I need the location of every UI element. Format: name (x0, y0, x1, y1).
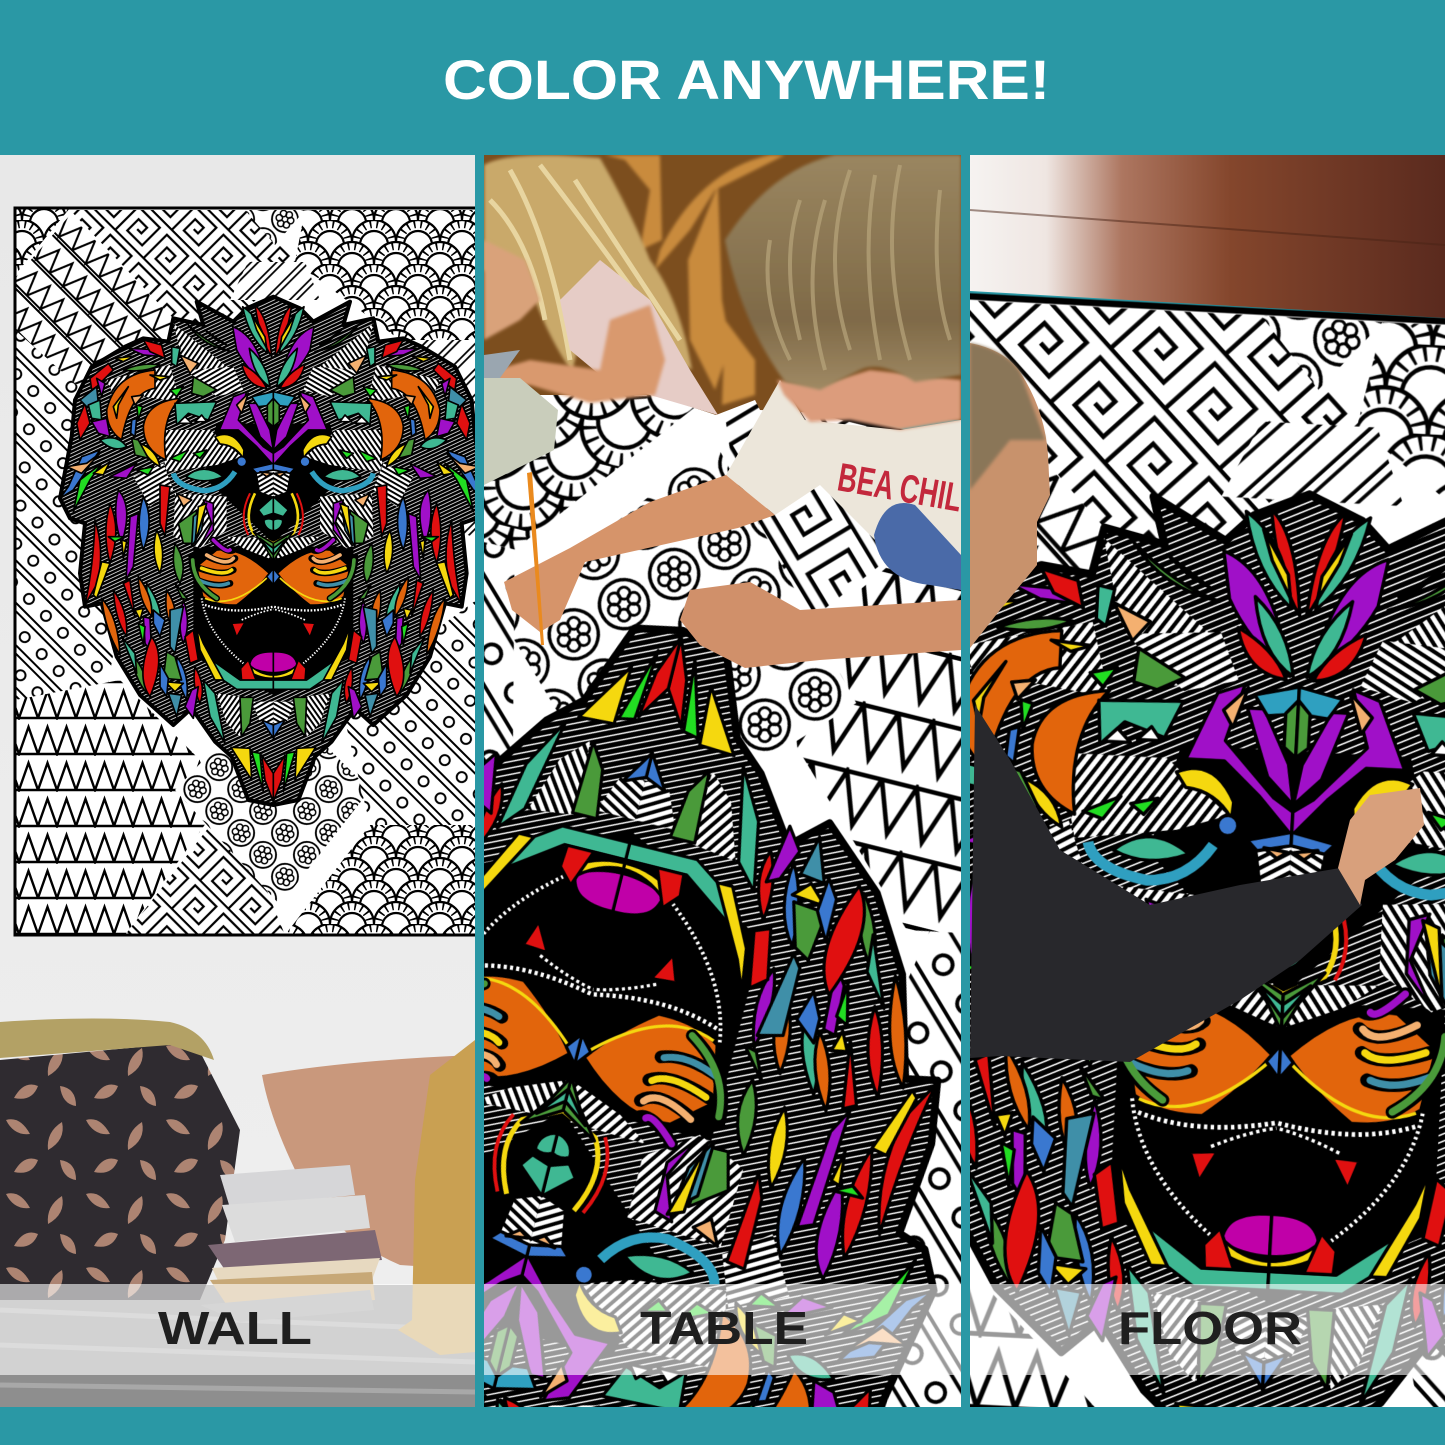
label: floor (970, 1284, 1445, 1375)
girl arm (495, 305, 665, 403)
basket with leaf pattern (0, 1042, 240, 1300)
boy hair highlights (768, 165, 950, 370)
panel: floor (970, 155, 1445, 1407)
table surface left (484, 350, 520, 378)
poster on table (484, 395, 961, 1407)
poster on floor (970, 292, 1445, 1407)
boy other arm (680, 582, 961, 668)
boy hair (725, 155, 961, 390)
label: wall (0, 1284, 475, 1375)
man sleeve (970, 705, 1362, 1062)
wood chairs background (484, 155, 961, 420)
wall background (0, 155, 475, 1407)
yellow blanket (398, 1040, 475, 1355)
plastic box (484, 378, 558, 485)
title: COLOR ANYWHERE! (443, 48, 1050, 111)
label: table: TABLE (640, 1302, 808, 1354)
wood floor (970, 155, 1445, 318)
girl hair (484, 155, 692, 372)
girl dress (560, 260, 718, 415)
man head (970, 343, 1050, 648)
label: wall: WALL (158, 1302, 312, 1354)
label: floor: FLOOR (1118, 1302, 1302, 1354)
boy writing arm (504, 475, 775, 632)
pencil (527, 472, 544, 645)
label: table (484, 1284, 961, 1375)
basket cloth (0, 1018, 214, 1060)
girl face (484, 240, 540, 340)
panel: table (484, 155, 965, 1407)
stack of books (208, 1165, 382, 1303)
poster on wall (13, 206, 475, 937)
panel: wall (0, 155, 475, 1407)
girl hair highlights (490, 165, 680, 360)
pillow (262, 1056, 455, 1266)
boy face (777, 370, 961, 430)
floor (0, 1285, 475, 1407)
floor plank line (970, 210, 1445, 245)
chair backs (605, 155, 785, 405)
man hand (1338, 788, 1424, 905)
man hair (970, 343, 1045, 490)
shirt whale (874, 503, 961, 590)
shirt print: BEA CHIL (834, 456, 965, 521)
boy shirt (726, 380, 961, 590)
